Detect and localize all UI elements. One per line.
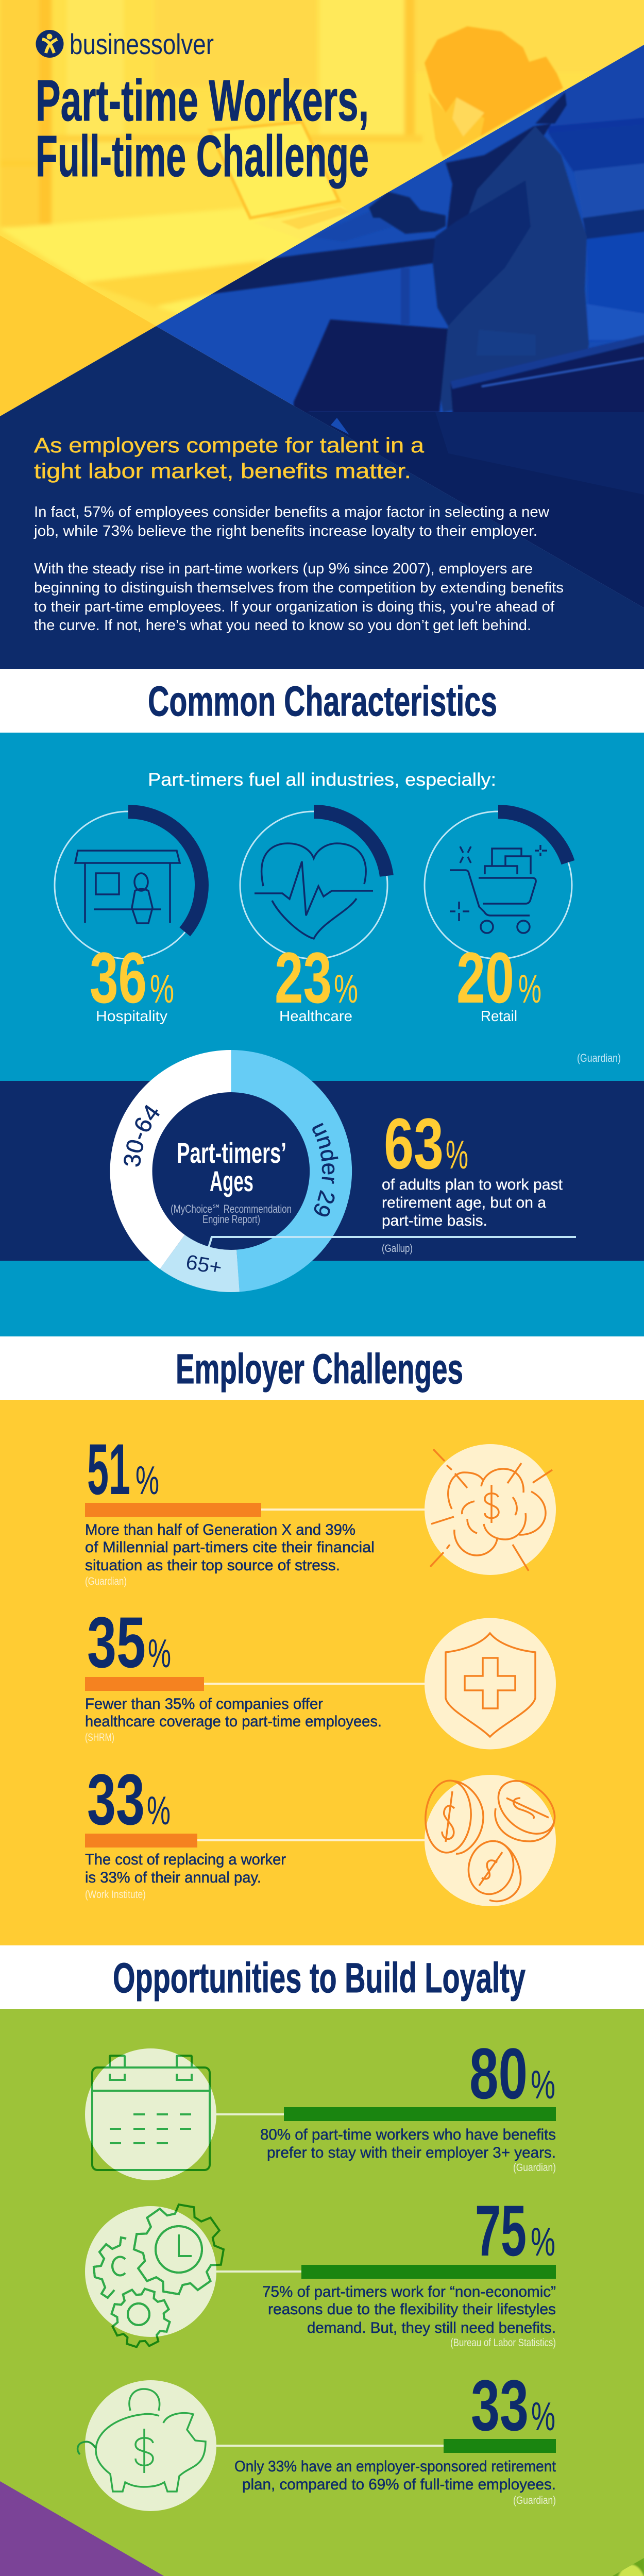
callout line — [209, 1237, 576, 1247]
stat: 75% — [262, 2190, 556, 2349]
retail ring — [425, 811, 572, 959]
intro text block — [33, 504, 564, 634]
stat: 33% retirement plan: Only 33% have an employer-sponsored retirement — [234, 2458, 556, 2475]
icon: shield — [425, 1618, 556, 1750]
stat: 75%: (Bureau of Labor Statistics) — [450, 2337, 556, 2349]
donut centre label: Ages — [210, 1165, 253, 1197]
stat: 51%: situation as their top source of stress. — [85, 1557, 340, 1574]
stat: 23% healthcare: Healthcare — [279, 1008, 352, 1025]
panel: gain more insights purple — [0, 2481, 644, 2576]
stat: 36% hospitality: 36 — [90, 937, 147, 1018]
stat: 80%: 80% of part-time workers who have benefits — [260, 2126, 556, 2143]
heading: part-timers fuel: Part-timers fuel all industries, especially: — [148, 770, 496, 790]
stat: 33% retirement plan: 33 — [471, 2365, 529, 2446]
stat: 51%: of Millennial part-timers cite their financial — [85, 1539, 375, 1556]
donut centre label — [171, 1137, 292, 1226]
stat: 51%: (Guardian) — [85, 1575, 127, 1587]
stat: 35%: 35 — [87, 1602, 146, 1683]
stat: 63% retirement: of adults plan to work past — [382, 1176, 563, 1193]
intro text block: to their part-time employees. If your organization is doing this, you’re ahead of — [34, 599, 555, 615]
stat: 63% retirement: retirement age, but on a — [382, 1194, 546, 1211]
stat: 63% retirement: (Gallup) — [382, 1243, 413, 1255]
stat: 20% retail: 20 — [456, 937, 514, 1018]
stat: 63% retirement: 63 — [384, 1103, 444, 1184]
icon: heart — [255, 843, 373, 939]
section band: Common Characteristics — [0, 669, 644, 733]
subheading: As employers compete for talent in a — [34, 433, 424, 457]
photo: man on phone — [613, 2558, 644, 2576]
donut chart: part-timers ages: under 29 — [312, 1123, 338, 1217]
title: Part-time Workers, — [36, 68, 369, 133]
stat: 33% retirement plan: plan, compared to 69% of full-time employees. — [242, 2476, 556, 2493]
donut centre label: (MyChoice℠ Recommendation — [171, 1202, 292, 1215]
section band: Common Characteristics: Common Characteristics — [148, 678, 497, 725]
stat: 80%: prefer to stay with their employer 3+ years. — [267, 2144, 556, 2161]
intro text block: With the steady rise in part-time workers (up 9% since 2007), employers are — [34, 561, 533, 577]
donut centre label: Part-timers’ — [177, 1137, 286, 1169]
icon: cart — [450, 845, 547, 933]
intro text block: beginning to distinguish themselves from the competition by extending benefits — [34, 580, 564, 596]
donut centre label: Engine Report) — [202, 1213, 260, 1226]
stat: 33% replacing a worker: (Work Institute) — [85, 1889, 146, 1901]
stat: 36% hospitality: % — [150, 966, 174, 1011]
panel: hero photo duotone — [0, 0, 644, 669]
stat: 20% retail: Retail — [481, 1008, 517, 1025]
stat: 33% replacing a worker: The cost of replacing a worker — [85, 1851, 286, 1868]
section band: Employer Challenges: Employer Challenges — [176, 1346, 463, 1393]
subheading — [34, 433, 424, 483]
icon: gears — [85, 2203, 225, 2348]
donut chart: part-timers ages: 65+ — [184, 1251, 224, 1279]
icon: piggy bank — [78, 2380, 216, 2511]
panel: industries — [0, 733, 644, 1336]
healthcare ring — [240, 811, 387, 959]
stat: 33% retirement plan: (Guardian) — [513, 2495, 556, 2506]
connector lines — [216, 2114, 444, 2446]
stat: 51%: % — [135, 1458, 159, 1503]
panel: employer challenges — [0, 1400, 644, 1945]
stat: 75%: 75% of part-timers work for “non-economic” — [262, 2283, 556, 2300]
stat: 33% replacing a worker: 33 — [87, 1759, 145, 1840]
stat: 35%: % — [148, 1631, 171, 1676]
stat: 63% retirement: % — [446, 1132, 468, 1177]
title — [36, 68, 369, 189]
stat: 33% retirement plan — [234, 2365, 556, 2506]
section band: Opportunities — [0, 1945, 644, 2009]
title: Full-time Challenge — [36, 124, 369, 189]
stat: 80% — [260, 2033, 556, 2174]
stat: 75%: 75 — [475, 2190, 527, 2271]
intro text block: In fact, 57% of employees consider benefits a major factor in selecting a new — [34, 504, 550, 520]
stat: 23% healthcare: % — [334, 966, 358, 1011]
icon: financial stress — [425, 1444, 556, 1575]
stat: 80%: % — [531, 2062, 555, 2107]
icon: coins — [423, 1770, 565, 1906]
section band: Employer Challenges — [0, 1336, 644, 1400]
stat: 35%: healthcare coverage to part-time employees. — [85, 1713, 382, 1730]
donut chart: part-timers ages: 30-64 — [124, 1105, 160, 1166]
stat: 75%: reasons due to the flexibility their lifestyles — [268, 2301, 556, 2318]
donut chart: part-timers ages — [110, 1050, 352, 1292]
stat: 35%: (SHRM) — [85, 1732, 114, 1743]
source: guardian: (Guardian) — [577, 1052, 621, 1064]
stat: 51%: More than half of Generation X and 39% — [85, 1521, 355, 1538]
icon: calendar — [85, 2048, 216, 2180]
stat: 33% replacing a worker: is 33% of their annual pay. — [85, 1869, 261, 1886]
stat: 33% retirement plan: % — [531, 2394, 555, 2439]
hospitality ring — [55, 811, 202, 959]
band: ages navy — [0, 1081, 644, 1261]
icon: hospitality — [75, 851, 180, 923]
stat: 63% retirement — [382, 1103, 563, 1255]
stat: 23% healthcare: 23 — [275, 937, 332, 1018]
stat: 51% — [85, 1429, 375, 1587]
stat: 75%: demand. But, they still need benefits. — [307, 2319, 556, 2336]
logo: businessolver top — [36, 28, 214, 60]
stat: 63% retirement: part-time basis. — [382, 1212, 487, 1229]
intro text block: job, while 73% believe the right benefits increase loyalty to their employer. — [33, 523, 537, 539]
stat: 33% replacing a worker: % — [147, 1788, 171, 1833]
subheading: tight labor market, benefits matter. — [34, 459, 411, 483]
panel: opportunities green — [0, 2009, 644, 2576]
stat: 80%: (Guardian) — [513, 2162, 556, 2174]
connector lines — [197, 1510, 428, 1840]
stat: 35% — [85, 1602, 382, 1743]
stat: 36% hospitality: Hospitality — [96, 1008, 168, 1025]
intro text block: the curve. If not, here’s what you need to know so you don’t get left behind. — [34, 617, 531, 634]
stat: 75%: % — [531, 2219, 555, 2264]
stat: 35%: Fewer than 35% of companies offer — [85, 1696, 323, 1713]
logo: businessolver top: businessolver — [70, 28, 214, 60]
stat: 33% replacing a worker — [85, 1759, 286, 1901]
stat: 20% retail: % — [518, 966, 541, 1011]
stat: 80%: 80 — [469, 2033, 528, 2114]
stat: 51%: 51 — [87, 1429, 130, 1510]
